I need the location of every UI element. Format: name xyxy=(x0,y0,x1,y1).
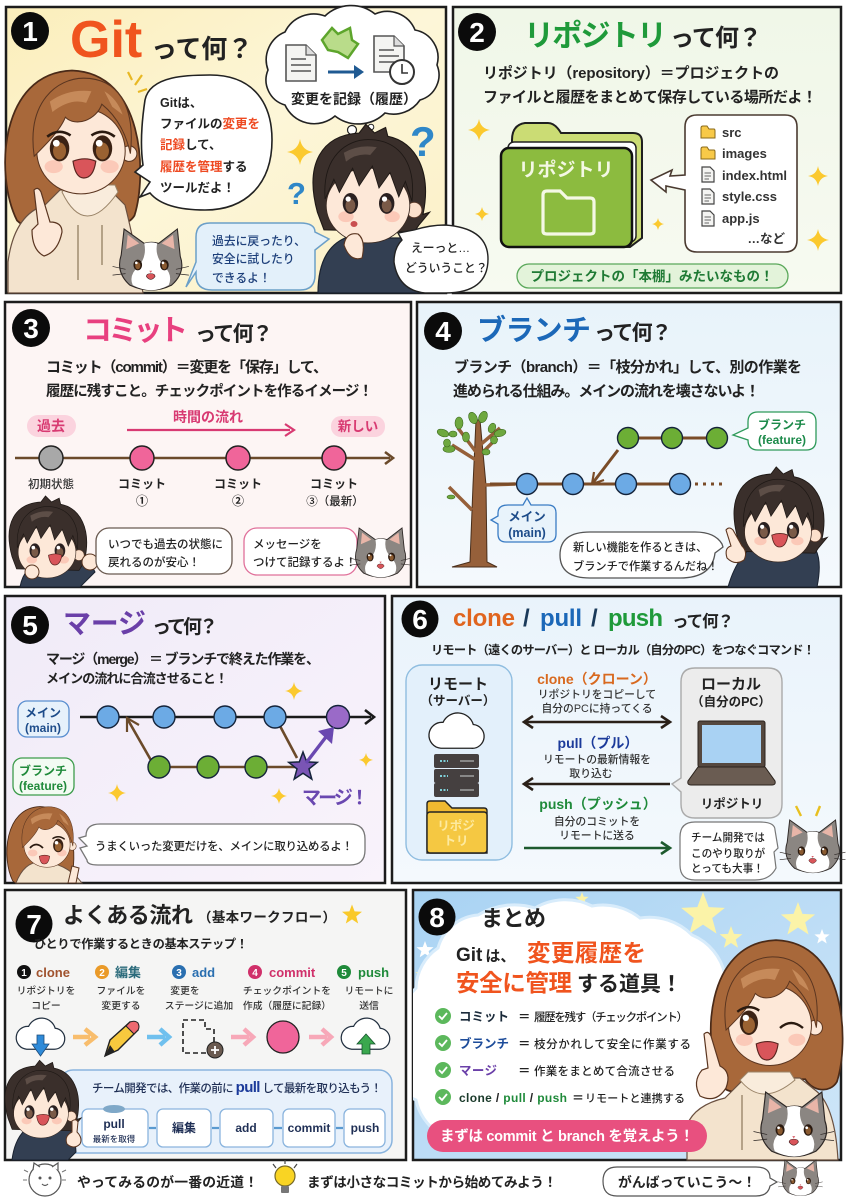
diagram: main and feature branches xyxy=(490,428,728,494)
text: branch definition xyxy=(453,358,802,400)
thought bubble: change record xyxy=(266,6,439,134)
speech bubble: girl explanation xyxy=(135,75,272,210)
badge 4 xyxy=(424,312,462,350)
headline: Git は変更履歴を安全に管理する道具: Gitは、 xyxy=(456,945,515,966)
speech bubble: girl explanation: Gitは、 xyxy=(160,96,202,110)
step 1: clone: コピー xyxy=(31,1000,61,1012)
heading: リポジトリって何？ xyxy=(524,20,762,53)
step 3: add: add xyxy=(192,965,215,980)
panel: 5 マージ xyxy=(5,596,385,883)
speech bubble: cat: とっても大事！ xyxy=(691,862,764,875)
speech bubble: girl explanation: 履歴を管理する xyxy=(160,159,248,174)
text: subtitle: ひとりで作業するときの基本ステップ！ xyxy=(34,936,248,951)
heading: ブランチって何？: って何？ xyxy=(594,322,672,345)
file list bubble xyxy=(651,115,797,252)
icon: green folder: リポジトリ xyxy=(518,158,614,181)
arrow xyxy=(147,1029,169,1045)
character: girl explaining xyxy=(5,70,143,293)
speech bubble: let's do it xyxy=(603,1167,777,1196)
timeline: commits over time: ② xyxy=(232,494,244,508)
box: local PC: （自分のPC） xyxy=(691,694,771,709)
speech bubble: cat blue: 過去に戻ったり、 xyxy=(212,234,306,248)
panel: 8 まとめ xyxy=(405,890,843,1160)
panel: 6 clone / pull / push xyxy=(392,596,845,883)
speech bubble: cat pink xyxy=(244,528,357,575)
box: local PC: リポジトリ xyxy=(701,796,763,811)
badge 5: 5 xyxy=(22,610,38,641)
heading: コミットって何？: って何？ xyxy=(195,323,273,346)
speech bubble: cat blue: 安全に試したり xyxy=(212,252,295,266)
heading: ブランチって何？: ブランチ xyxy=(477,313,591,347)
icon: light bulb xyxy=(273,1160,297,1193)
list: summary checks: ＝ xyxy=(572,1091,584,1105)
badge 2 xyxy=(458,13,496,51)
character: small cat xyxy=(778,1160,823,1196)
speech bubble: boy: 新しい機能を作るときは、 xyxy=(573,540,707,554)
badge 1: 1 xyxy=(22,16,38,47)
timeline: commits over time xyxy=(15,409,393,508)
label: main pill: メイン xyxy=(25,706,61,720)
speech bubble: boy: いつでも過去の状態に xyxy=(108,537,223,551)
white cloud background xyxy=(405,900,735,1135)
step 4: commit: チェックポイントを xyxy=(243,985,331,997)
badge 7 xyxy=(16,906,52,942)
list: summary checks: 作業をまとめて合流させる xyxy=(534,1064,675,1078)
box: local PC xyxy=(672,668,782,818)
timeline: commits over time: コミット xyxy=(310,477,358,491)
box: remote server: リモート xyxy=(428,676,488,693)
callout: first learn commit and branch xyxy=(427,1120,707,1152)
badge 5 xyxy=(11,606,49,644)
speech bubble: cat xyxy=(680,822,778,880)
text: commit definition: 履歴に残すこと。チェックポイントを作るイメージ！ xyxy=(46,382,373,400)
timeline: commits over time: ① xyxy=(136,494,148,508)
step 1: clone: clone xyxy=(36,965,70,980)
box: team workflow: チーム開発では、作業の前に pull して最新を取り込もう！ xyxy=(92,1079,382,1096)
step 4: commit: 4 xyxy=(252,968,258,979)
step 3: add: ステージに追加 xyxy=(165,999,233,1012)
callout: bookshelf xyxy=(517,264,788,288)
heading: clone / pull / push って何？: / xyxy=(523,605,530,632)
arrows and labels: clone pull push xyxy=(524,671,670,854)
text: merge definition xyxy=(46,651,320,686)
badge 2: 2 xyxy=(469,17,485,48)
character: boy cheering xyxy=(9,496,98,587)
label: feature pill xyxy=(13,758,74,795)
icon: green folder xyxy=(501,123,642,247)
badge 8 xyxy=(418,898,456,936)
heading: マージって何？: って何？ xyxy=(152,616,218,638)
speech bubble: boy xyxy=(560,532,723,578)
list: summary checks: clone / pull / push xyxy=(459,1091,567,1105)
step 5: push: 送信 xyxy=(359,999,379,1012)
file list bubble: index.html xyxy=(722,168,787,183)
speech bubble: boy confused (overlaps panels 1 and 2) xyxy=(394,225,488,293)
sparkles xyxy=(108,682,373,804)
speech bubble: girl xyxy=(79,824,365,865)
heading: コミットって何？: コミット xyxy=(83,315,188,347)
label: feature pill: (feature) xyxy=(19,779,67,793)
step 2: 編集: ファイルを xyxy=(97,985,145,997)
label: main pill xyxy=(18,701,69,737)
timeline: commits over time: 過去 xyxy=(37,418,65,434)
list: summary checks: ＝ xyxy=(518,1064,531,1078)
character: cat xyxy=(113,229,189,290)
arrow xyxy=(73,1029,95,1045)
list: summary checks: ＝ xyxy=(518,1037,531,1051)
badge 8: 8 xyxy=(429,902,445,933)
character: boy thinking xyxy=(313,124,430,293)
text: repository definition: ファイルと履歴をまとめて保存している場所だよ！ xyxy=(483,88,817,106)
list: summary checks: ブランチ xyxy=(459,1036,509,1051)
decorative stars xyxy=(415,892,830,982)
speech bubble: girl explanation: ツールだよ！ xyxy=(160,181,235,195)
file list bubble: app.js xyxy=(722,211,760,226)
illustration: tree xyxy=(436,410,515,567)
list: summary checks: コミット xyxy=(459,1010,509,1024)
text: branch definition: 進められる仕組み。メインの流れを壊さないよ！ xyxy=(453,382,760,400)
step 5: push: push xyxy=(358,965,389,980)
character: boy pointing xyxy=(726,467,827,587)
arrows and labels: clone pull push: 自分のPCに持ってくる xyxy=(541,701,653,715)
heading: clone / pull / push って何？: って何？ xyxy=(672,612,734,631)
label: マージ！: マージ！ xyxy=(302,788,369,809)
text: commit definition: コミット（commit）＝変更を「保存」して、 xyxy=(46,358,328,376)
list: summary checks: ＝ xyxy=(518,1010,531,1024)
step 3: add: 3 xyxy=(176,968,182,979)
heading: clone / pull / push って何？: pull xyxy=(540,605,582,632)
speech bubble: boy confused (overlaps panels 1 and 2): どういうこと？ xyxy=(405,261,488,275)
file list bubble: src xyxy=(722,125,742,140)
panel: 1 Git って何？ xyxy=(5,6,446,293)
box: team workflow xyxy=(60,1070,392,1153)
step 4: commit xyxy=(243,965,331,1053)
headline: Git は変更履歴を安全に管理する道具 xyxy=(456,940,682,996)
box: team workflow: commit xyxy=(288,1121,330,1135)
icon: round face xyxy=(23,1163,66,1196)
text: repository definition: リポジトリ（repository）＝プロジェクトの xyxy=(483,65,779,82)
heading: Git って何？: って何？ xyxy=(151,34,253,64)
headline: Git は変更履歴を安全に管理する道具: 安全に管理 xyxy=(456,970,572,996)
label: ブランチ (feature): ブランチ xyxy=(758,417,806,432)
character: cat xyxy=(350,528,411,577)
speech bubble: cat blue xyxy=(186,223,329,290)
speech bubble: cat: このやり取りが xyxy=(691,847,766,860)
headline: Git は変更履歴を安全に管理する道具: 変更履歴を xyxy=(527,940,646,966)
heading: よくある流れ xyxy=(63,903,362,928)
speech bubble: girl: うまくいった変更だけを、メインに取り込めるよ！ xyxy=(95,839,353,853)
box: remote server: リポジ xyxy=(437,818,475,833)
heading: clone / pull / push って何？: / xyxy=(591,605,598,632)
arrows and labels: clone pull push: pull（プル） xyxy=(558,735,638,751)
step 2: 編集: 変更する xyxy=(101,999,141,1012)
step 2: 編集: 2 xyxy=(99,968,105,979)
label: feature pill: ブランチ xyxy=(19,763,67,778)
badge 1 xyxy=(11,12,49,50)
badge 6: 6 xyxy=(412,604,428,635)
heading: リポジトリって何？: って何？ xyxy=(670,25,762,52)
arrows and labels: clone pull push: リモートの最新情報を xyxy=(543,752,651,766)
arrow xyxy=(309,1029,331,1045)
step 5: push: リモートに xyxy=(345,985,393,997)
label: main pill: (main) xyxy=(25,721,61,735)
panel: 4 ブランチ xyxy=(417,302,841,587)
heading: ブランチって何？ xyxy=(477,313,672,347)
box: team workflow: pull xyxy=(103,1117,125,1131)
speech bubble: cat: チーム開発では xyxy=(691,831,765,844)
step 5: push xyxy=(337,965,393,1054)
heading: マージって何？ xyxy=(63,608,218,639)
heading: Git って何？ xyxy=(70,11,253,69)
icon: question marks and star: ? xyxy=(410,118,436,165)
speech bubble: cat blue: できるよ！ xyxy=(212,271,271,285)
diagram: merge graph xyxy=(80,706,374,779)
callout: bookshelf: プロジェクトの「本棚」みたいなもの！ xyxy=(530,268,774,284)
text: tip 1: やってみるのが一番の近道！ xyxy=(77,1174,258,1190)
character: cat xyxy=(780,806,845,873)
panel: 7 よくある流れ xyxy=(5,890,406,1160)
text: branch definition: ブランチ（branch）＝「枝分かれ」して、別の作業を xyxy=(454,358,802,376)
speech bubble: boy: ブランチで作業するんだね！ xyxy=(573,559,718,573)
arrow xyxy=(231,1029,253,1045)
box: local PC: ローカル xyxy=(701,676,761,693)
panel: 3 コミット xyxy=(5,302,411,587)
step 5: push: 5 xyxy=(341,968,347,979)
timeline: commits over time: コミット xyxy=(214,477,262,491)
list: summary checks xyxy=(435,1008,691,1105)
character: girl winking xyxy=(687,940,843,1160)
arrows and labels: clone pull push: push（プッシュ） xyxy=(539,796,657,812)
headline: Git は変更履歴を安全に管理する道具: する道具！ xyxy=(577,973,682,996)
step 4: commit: commit xyxy=(269,965,316,980)
icon: question marks and star xyxy=(128,72,436,211)
box: team workflow: 編集 xyxy=(172,1120,196,1135)
panel: 2 リポジトリ xyxy=(453,7,841,293)
speech bubble: girl explanation: ファイルの変更を xyxy=(160,116,260,131)
label: メイン (main): メイン xyxy=(508,510,546,524)
heading: Git って何？: Git xyxy=(70,11,142,69)
label: ブランチ (feature) xyxy=(733,412,816,450)
thought bubble: change record: 変更を記録（履歴） xyxy=(291,91,417,107)
sparkles xyxy=(468,119,829,251)
arrows and labels: clone pull push: リモートに送る xyxy=(559,828,635,842)
speech bubble: boy: 戻れるのが安心！ xyxy=(108,555,200,569)
box: team workflow: add xyxy=(235,1121,257,1135)
text: tip 2: まずは小さなコミットから始めてみよう！ xyxy=(307,1174,557,1190)
timeline: commits over time: 初期状態 xyxy=(28,477,74,491)
heading: よくある流れ: よくある流れ xyxy=(63,903,193,928)
list: summary checks: 枝分かれして安全に作業する xyxy=(534,1037,691,1051)
heading: よくある流れ: （基本ワークフロー） xyxy=(198,909,336,925)
icon: question marks and star: ? xyxy=(287,176,306,211)
footer: closing messages xyxy=(23,1160,823,1196)
arrows and labels: clone pull push: リポジトリをコピーして xyxy=(538,688,656,701)
speech bubble: boy xyxy=(96,528,232,574)
text: merge definition: マージ（merge） ＝ ブランチで終えた作業を、 xyxy=(46,651,320,667)
timeline: commits over time: 時間の流れ xyxy=(173,409,243,425)
label: メイン (main): (main) xyxy=(508,526,546,540)
list: summary checks: 履歴を残す（チェックポイント） xyxy=(534,1010,688,1024)
step 2: 編集: 編集 xyxy=(115,965,141,980)
file list bubble: …など xyxy=(747,231,785,246)
box: remote server: トリ xyxy=(443,834,469,848)
heading: マージって何？: マージ xyxy=(63,608,146,639)
arrows and labels: clone pull push: clone（クローン） xyxy=(537,671,657,687)
step 1: clone: リポジトリを xyxy=(17,985,75,997)
speech bubble: cat pink: メッセージを xyxy=(253,538,322,551)
timeline: commits over time: 新しい xyxy=(338,419,378,434)
heading: clone / pull / push って何？ xyxy=(453,605,734,632)
label: ブランチ (feature): (feature) xyxy=(758,433,806,447)
file list bubble: style.css xyxy=(722,189,777,204)
step 4: commit: 作成（履歴に記録） xyxy=(243,999,331,1012)
badge 7: 7 xyxy=(26,909,42,940)
speech bubble: cat pink: つけて記録するよ！ xyxy=(253,555,356,569)
heading: まとめ: まとめ xyxy=(481,906,546,931)
callout: first learn commit and branch: まずは commit と branch を覚えよう！ xyxy=(440,1128,694,1145)
speech bubble: boy confused (overlaps panels 1 and 2): えーっと… xyxy=(411,241,470,255)
character: girl winking xyxy=(7,807,82,883)
character: boy with thumb up xyxy=(5,1060,81,1160)
step 1: clone: 1 xyxy=(21,968,27,979)
speech bubble: girl explanation: 記録して、 xyxy=(160,137,222,152)
heading: clone / pull / push って何？: push xyxy=(608,605,663,632)
box: team workflow: 最新を取得 xyxy=(93,1134,136,1144)
list: summary checks: リモートと連携する xyxy=(585,1091,685,1105)
timeline: commits over time: コミット xyxy=(118,477,166,491)
step 3: add xyxy=(165,965,233,1058)
step 2: 編集 xyxy=(95,965,145,1056)
heading: リポジトリって何？: リポジトリ xyxy=(524,20,667,53)
text: merge definition: メインの流れに合流させること！ xyxy=(46,671,228,686)
badge 3: 3 xyxy=(23,313,39,344)
list: summary checks: マージ xyxy=(459,1064,497,1078)
box: remote server: （サーバー） xyxy=(421,694,495,708)
badge 6 xyxy=(402,600,438,638)
step 3: add: 変更を xyxy=(170,984,200,997)
box: remote server xyxy=(406,665,512,860)
speech bubble: let's do it: がんばっていこう〜！ xyxy=(618,1174,756,1190)
step 1: clone xyxy=(16,965,75,1056)
timeline: commits over time: ③（最新） xyxy=(306,495,364,508)
heading: コミットって何？ xyxy=(83,315,273,347)
character: cat xyxy=(753,1092,834,1157)
text: repository definition xyxy=(483,65,817,106)
label: メイン (main) xyxy=(491,498,556,542)
heading: clone / pull / push って何？: clone xyxy=(453,605,515,632)
arrows and labels: clone pull push: 取り込む xyxy=(569,767,613,780)
arrows and labels: clone pull push: 自分のコミットを xyxy=(554,815,640,828)
text: subtitle: リモート（遠くのサーバー）と ローカル（自分のPC）をつなぐコマンド！ xyxy=(431,642,815,657)
file list bubble: images xyxy=(722,146,767,161)
box: team workflow: push xyxy=(351,1121,379,1135)
text: commit definition xyxy=(46,358,373,400)
badge 3 xyxy=(12,309,50,347)
badge 4: 4 xyxy=(435,316,451,347)
